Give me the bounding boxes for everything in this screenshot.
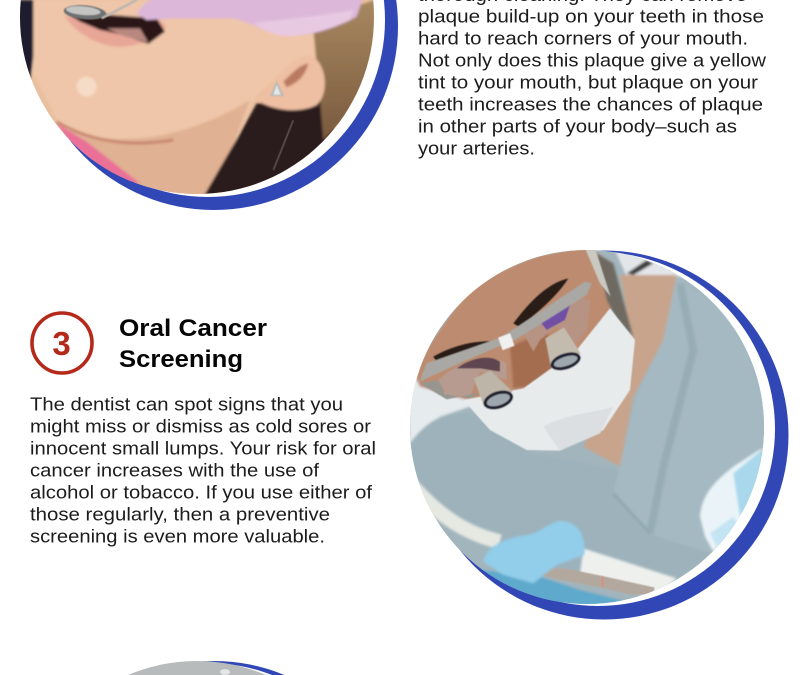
dental mirror — [63, 0, 293, 170]
text block: oral cancer screening description: alcohol or tobacco. If you use either of — [30, 482, 373, 503]
surgical mask — [463, 308, 635, 451]
text block: plaque cleaning explanation: Not only does this plaque give a yellow — [418, 50, 767, 71]
heading: Oral Cancer Screening — [119, 315, 267, 373]
text block: oral cancer screening description: those regularly, then a preventive — [30, 504, 330, 525]
panel: dentist exam photo in circular frame — [13, 0, 398, 210]
eyebrows — [513, 278, 568, 327]
text block: oral cancer screening description: screening is even more valuable. — [30, 526, 325, 547]
blue crescent ring — [144, 661, 284, 675]
loupe lenses — [474, 371, 513, 407]
panel: dentist with loupes photo in circular frame — [407, 247, 788, 620]
text block: oral cancer screening description: The dentist can spot signs that you — [30, 394, 343, 415]
dental handpiece — [543, 570, 653, 593]
text block: oral cancer screening description — [30, 394, 376, 547]
right gloved hand — [700, 448, 765, 552]
icon: number 3 badge: 3 — [52, 325, 71, 362]
neck — [583, 275, 677, 467]
lower white sleeve area — [580, 548, 677, 598]
text block: oral cancer screening description: cancer increases with the use of — [30, 460, 320, 481]
blue cloth — [482, 568, 624, 604]
earring — [270, 81, 284, 96]
left gloved hand — [483, 521, 584, 583]
eyeglass lenses — [523, 299, 591, 352]
heading: Oral Cancer Screening: Oral Cancer — [119, 315, 267, 342]
text block: plaque cleaning explanation: in other parts of your body–such as — [418, 116, 737, 137]
forehead and face — [413, 247, 613, 400]
text block: oral cancer screening description: might miss or dismiss as cold sores or — [30, 416, 371, 437]
left scrubs shoulder — [410, 418, 683, 580]
scrubs collar — [714, 304, 764, 456]
blue crescent ring — [30, 0, 398, 210]
photo: patient having teeth examined — [13, 0, 380, 200]
photo: partially visible top — [128, 661, 266, 675]
panel: next photo in circular frame, cropped at page bottom — [128, 661, 284, 675]
background upper right — [614, 252, 682, 278]
icon: number 3 badge — [32, 313, 92, 373]
text block: plaque cleaning explanation: plaque build-up on your teeth in those — [418, 6, 764, 27]
text block: plaque cleaning explanation: tint to your mouth, but plaque on your — [418, 72, 758, 93]
photo: dentist wearing mask and loupes — [407, 247, 773, 613]
text block: plaque cleaning explanation — [418, 0, 767, 158]
text block: plaque cleaning explanation: teeth increases the chances of plaque — [418, 94, 763, 115]
glasses frame — [419, 282, 592, 382]
text block: oral cancer screening description: innocent small lumps. Your risk for oral — [30, 438, 376, 459]
blue crescent ring — [420, 250, 788, 620]
text block: plaque cleaning explanation: hard to reach corners of your mouth. — [418, 28, 748, 49]
heading: Oral Cancer Screening: Screening — [119, 346, 243, 373]
instrument tube — [410, 483, 500, 542]
text block: plaque cleaning explanation: your arteries. — [418, 137, 535, 158]
sideburn — [597, 253, 633, 337]
light background left — [407, 373, 470, 443]
